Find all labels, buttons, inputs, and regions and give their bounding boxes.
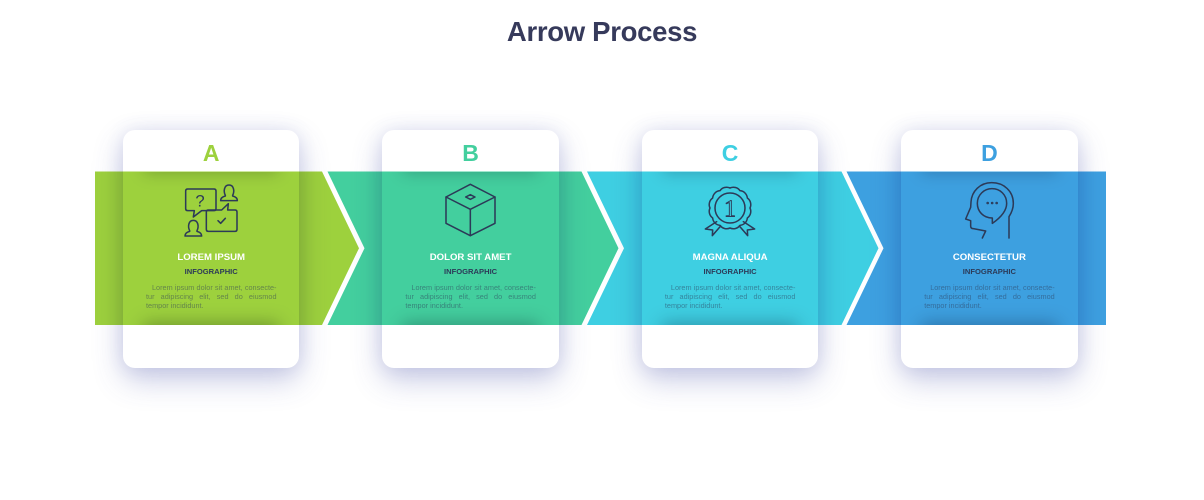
body text: tempor incididunt. xyxy=(146,301,204,310)
icon: medal: 1 xyxy=(724,196,736,222)
arrow D xyxy=(846,172,1106,325)
label: Lorem ipsum: LOREM IPSUM xyxy=(177,252,245,262)
icon: medal xyxy=(704,186,756,236)
panel: D xyxy=(924,140,1055,310)
panel: C xyxy=(665,140,796,310)
body text xyxy=(405,282,536,310)
icon: question and answer chat: ? xyxy=(195,192,205,211)
subtitle: INFOGRAPHIC xyxy=(444,267,497,276)
body text: tur adipiscing elit, sed do eiusmod xyxy=(924,292,1055,301)
subtitle: INFOGRAPHIC xyxy=(185,267,238,276)
letter A: A xyxy=(203,140,220,166)
icon: question and answer chat xyxy=(184,184,238,237)
title: Arrow Process xyxy=(507,16,697,47)
body text: tempor incididunt. xyxy=(665,301,722,310)
body text: tur adipiscing elit, sed do eiusmod xyxy=(405,292,536,301)
panel: A xyxy=(146,140,276,310)
body text: tempor incididunt. xyxy=(405,301,463,310)
body text: Lorem ipsum dolor sit amet, consecte- xyxy=(930,282,1055,292)
subtitle: INFOGRAPHIC xyxy=(963,267,1016,276)
body text: tur adipiscing elit, sed do eiusmod xyxy=(146,292,276,301)
panel: B xyxy=(405,140,536,310)
label: Consectetur: CONSECTETUR xyxy=(953,252,1026,262)
body text: tur adipiscing elit, sed do eiusmod xyxy=(665,292,795,301)
subtitle: INFOGRAPHIC xyxy=(704,267,757,276)
letter D: D xyxy=(981,140,998,166)
arrow B xyxy=(328,172,618,325)
label: Dolor sit amet: DOLOR SIT AMET xyxy=(430,252,511,262)
body text: tempor incididunt. xyxy=(924,301,982,310)
card C background xyxy=(642,130,818,368)
card B background xyxy=(382,130,559,368)
icon: cube xyxy=(445,184,496,236)
arrow C xyxy=(587,172,878,325)
icon: head with speech bubble xyxy=(964,182,1014,239)
body text xyxy=(665,282,796,310)
arrow A xyxy=(95,172,359,325)
card A background xyxy=(123,130,299,368)
label: Magna aliqua: MAGNA ALIQUA xyxy=(693,252,768,262)
body text: Lorem ipsum dolor sit amet, consecte- xyxy=(411,282,536,292)
letter B: B xyxy=(462,140,479,166)
letter C: C xyxy=(722,140,738,166)
body text: Lorem ipsum dolor sit amet, consecte- xyxy=(152,282,276,292)
body text: Lorem ipsum dolor sit amet, consecte- xyxy=(671,282,795,292)
card D background xyxy=(901,130,1078,368)
body text xyxy=(146,282,276,310)
body text xyxy=(924,282,1055,310)
